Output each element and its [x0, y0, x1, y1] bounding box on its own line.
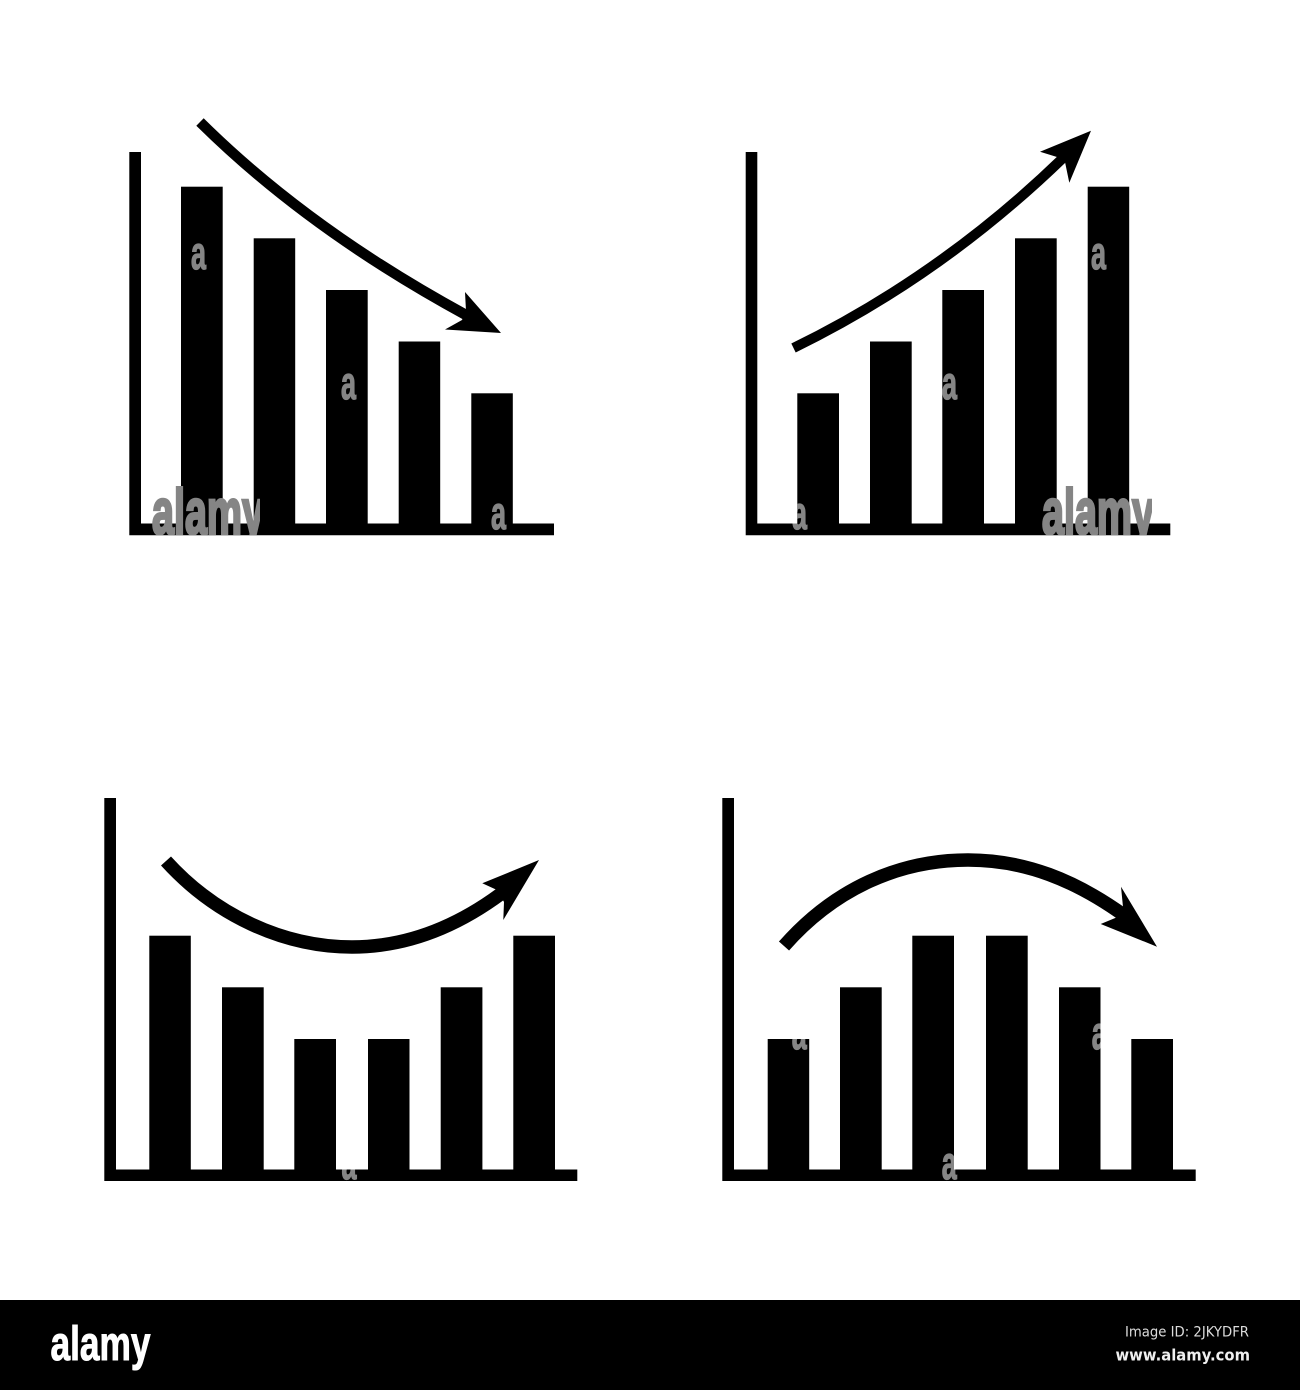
axes	[129, 152, 554, 535]
watermark: letter fragments over black shapes: a	[1091, 227, 1106, 279]
arrow: rising trend	[794, 131, 1091, 348]
arrow: dip then recovery	[166, 860, 539, 947]
bars	[768, 936, 1173, 1170]
watermark: letter fragments over black shapes: a	[792, 1007, 807, 1059]
watermark: letter fragments over black shapes: alamy	[152, 476, 264, 548]
watermark: letter fragments over black shapes: a	[341, 357, 356, 409]
watermark: letter fragments over black shapes: a	[1092, 1007, 1107, 1059]
watermark: letter fragments over black shapes: alamy	[1042, 476, 1154, 548]
watermark: letter fragments over black shapes: a	[491, 487, 506, 539]
arrow: falling trend	[200, 122, 501, 333]
panel: U-shaped bar chart	[104, 798, 577, 1181]
watermark: letter fragments over black shapes: a	[792, 487, 807, 539]
bars	[181, 187, 513, 524]
panel: arch-shaped bar chart	[722, 798, 1196, 1181]
axes	[746, 152, 1170, 535]
footer bar	[0, 1300, 1300, 1390]
panel: decreasing bar chart	[129, 122, 554, 535]
axes	[722, 798, 1196, 1181]
logo: alamy: alamy	[50, 1318, 151, 1371]
arrow: rise then decline	[784, 860, 1157, 947]
watermark: letter fragments over black shapes: a	[191, 227, 206, 279]
axes	[104, 798, 577, 1181]
bars	[149, 936, 555, 1170]
watermark: letter fragments over black shapes: a	[942, 357, 957, 409]
website url: www.alamy.com	[1116, 1346, 1250, 1364]
watermark: letter fragments over black shapes: a	[942, 1137, 957, 1189]
watermark: letter fragments over black shapes: a	[342, 1137, 357, 1189]
watermark: letter fragments over black shapes	[152, 227, 1154, 1189]
image id: Image ID: 2JKYDFR	[1125, 1324, 1249, 1340]
bars	[797, 187, 1129, 524]
panel: increasing bar chart	[746, 131, 1170, 535]
